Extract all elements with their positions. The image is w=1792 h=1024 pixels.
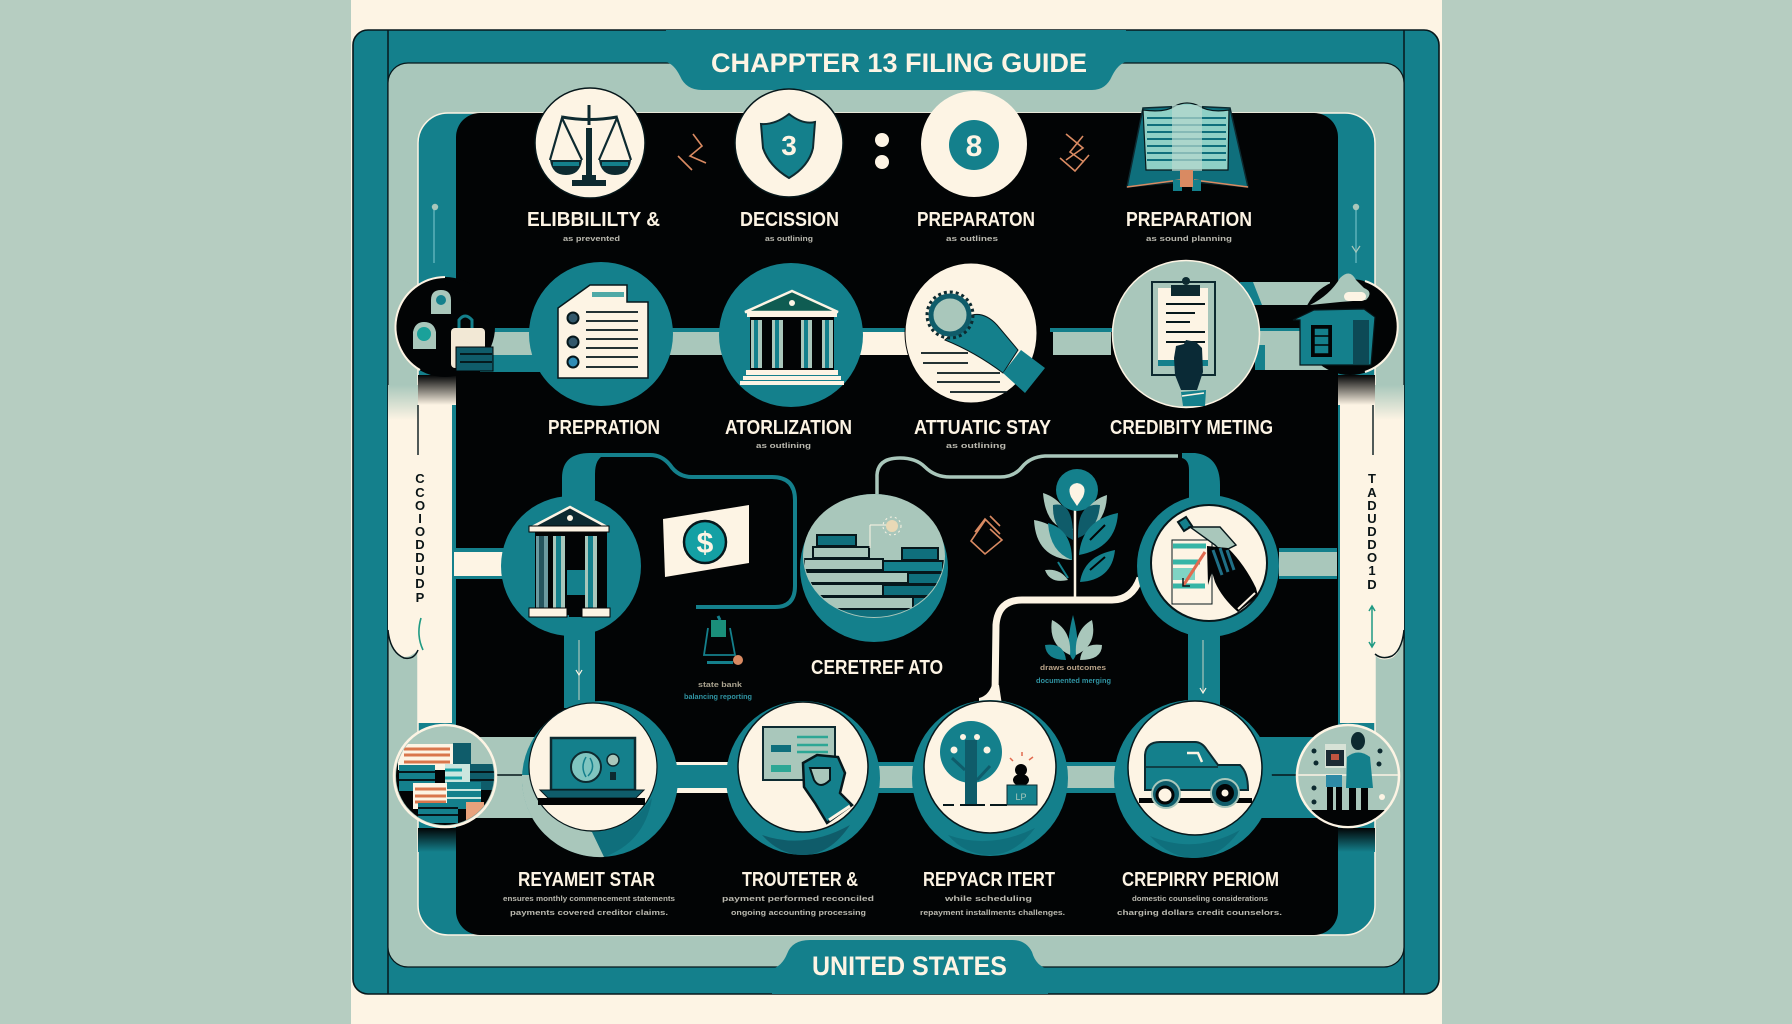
small filing icon with caption [684, 616, 752, 701]
step: certificate [800, 494, 948, 679]
vertical rail text: D [415, 576, 425, 591]
black content panel [456, 113, 1338, 935]
icon: dollar coin: $ [697, 527, 714, 560]
rail markers [418, 204, 1375, 852]
icon: shield with number: 3 [781, 130, 797, 161]
step: credit report period [1114, 700, 1282, 917]
caption: draws outcomes [1040, 663, 1106, 672]
icon: shield with number [761, 114, 815, 178]
icon: people at kiosk [1298, 732, 1400, 830]
left lock circle [395, 277, 495, 377]
step: preparation book [1126, 103, 1252, 243]
vertical rail text: T [1368, 471, 1376, 486]
icon: stacked documents [395, 743, 495, 830]
left stack circle [394, 725, 496, 830]
vertical rail text: D [1367, 537, 1377, 552]
label: DECISSION [740, 209, 839, 231]
outer teal frame [353, 30, 1439, 994]
step: automatic stay [905, 263, 1052, 450]
description line: payment performed reconciled [722, 894, 875, 903]
pause dots [875, 133, 889, 169]
description line: charging dollars credit counselors. [1117, 908, 1282, 917]
sublabel: as outlines [946, 234, 998, 243]
description line: domestic counseling considerations [1132, 894, 1268, 903]
flow path: bank to money [564, 455, 795, 607]
description line: while scheduling [944, 894, 1033, 903]
vertical rail text: P [416, 590, 425, 605]
icon: bag [704, 616, 743, 665]
icon: hand marking form [1172, 517, 1258, 612]
row 3 side connectors [454, 548, 1337, 579]
label: REPYACR ITERT [923, 869, 1055, 891]
icon: laptop [538, 738, 645, 805]
step: repayment start [503, 701, 678, 917]
flow path: certificate to hand [877, 453, 1220, 500]
title: CHAPPTER 13 FILING GUIDE [711, 48, 1087, 78]
vertical rail text: O [1367, 550, 1377, 565]
step: eligibility [527, 88, 660, 243]
vertical rail text: D [415, 550, 425, 565]
icon: tree and person: LP [1015, 792, 1027, 802]
row 4 connector bands [476, 737, 1320, 818]
label: ELIBBILILTY & [527, 209, 660, 231]
icon: stacked records [804, 535, 948, 619]
label: CREDIBITY METING [1110, 417, 1273, 439]
label: TROUTETER & [742, 869, 858, 891]
header tab with title [666, 30, 1126, 90]
description line: payments covered creditor claims. [510, 908, 668, 917]
description line: ongoing accounting processing [731, 908, 866, 917]
vertical rail text: U [1367, 511, 1377, 526]
vertical rail text: C [415, 471, 425, 486]
step: repayment item [912, 700, 1068, 917]
vertical rail text: O [415, 524, 425, 539]
step: trustee [722, 701, 880, 917]
icon: tree and person [940, 721, 1037, 805]
footer tab with country [772, 940, 1048, 994]
icon: locks [413, 290, 493, 371]
icon: sprout [1045, 615, 1102, 660]
vertical rail text: D [415, 537, 425, 552]
right house circle [1293, 273, 1398, 375]
down connectors [564, 630, 1220, 708]
icon: car [1139, 742, 1252, 808]
label: PREPARATON [917, 209, 1035, 231]
icon: numbered badge: 8 [966, 130, 982, 163]
description line: ensures monthly commencement statements [503, 894, 675, 903]
icon: bank building [529, 507, 610, 617]
icon: clipboard and hand [1152, 277, 1215, 406]
sublabel: as sound planning [1146, 234, 1233, 243]
icon: open book [1127, 103, 1248, 191]
sublabel: as outlining [756, 441, 812, 450]
icon: numbered badge [949, 120, 999, 170]
icon: plant [1034, 469, 1118, 600]
icon: courthouse [740, 291, 844, 385]
icon: stamp and hand [921, 292, 1045, 393]
caption: documented merging [1036, 676, 1111, 685]
sublabel: as prevented [563, 234, 621, 243]
label: PREPARATION [1126, 209, 1252, 231]
vertical rail text: A [1367, 485, 1377, 500]
icon: building with smoke [1293, 273, 1375, 365]
vertical rail text: C [415, 485, 425, 500]
vertical rail text: D [1367, 524, 1377, 539]
right people circle [1297, 725, 1400, 830]
label: PREPRATION [548, 417, 660, 439]
sublabel: as outlining [765, 234, 813, 243]
description line: repayment installments challenges. [920, 908, 1065, 917]
label: CREPIRRY PERIOM [1122, 869, 1279, 891]
vertical rail text: I [418, 511, 422, 526]
row 2 connector bands [480, 282, 1330, 372]
vertical rail text: D [1367, 577, 1377, 592]
label: CERETREF ATO [811, 657, 943, 679]
flow path: hand to repayment [979, 578, 1140, 705]
icon: tablet and hand [763, 727, 852, 823]
small plant with caption [1036, 615, 1111, 685]
label: ATORLIZATION [725, 417, 852, 439]
step: preparation number [917, 91, 1035, 243]
left cream side rail [388, 375, 456, 723]
step: decision [735, 89, 843, 243]
icon: spark [870, 517, 901, 548]
icon: document [558, 285, 648, 378]
step: hand signing [1137, 495, 1279, 637]
vertical rail text: U [415, 563, 425, 578]
step: credibility meeting [1110, 260, 1273, 439]
country label: UNITED STATES [812, 951, 1007, 981]
right cream side rail [1338, 375, 1404, 723]
vertical rail text: D [1367, 498, 1377, 513]
arrow glyphs [678, 134, 1089, 171]
money flag [663, 505, 749, 577]
label: ATTUATIC STAY [914, 417, 1052, 439]
icon: scales of justice [550, 105, 631, 186]
sage inner panel [388, 63, 1404, 967]
step: bank [501, 496, 641, 636]
vertical rail text: 1 [1368, 563, 1376, 578]
label: REYAMEIT STAR [518, 869, 655, 891]
step: preparation document [529, 262, 673, 439]
caption: state bank [698, 680, 743, 689]
inner teal track [418, 113, 1375, 935]
caption: balancing reporting [684, 692, 752, 701]
step: attorney [719, 263, 863, 450]
vertical rail text: O [415, 498, 425, 513]
cream sheet [351, 0, 1442, 1024]
sublabel: as outlining [946, 441, 1007, 450]
arrow glyph [971, 516, 1002, 554]
